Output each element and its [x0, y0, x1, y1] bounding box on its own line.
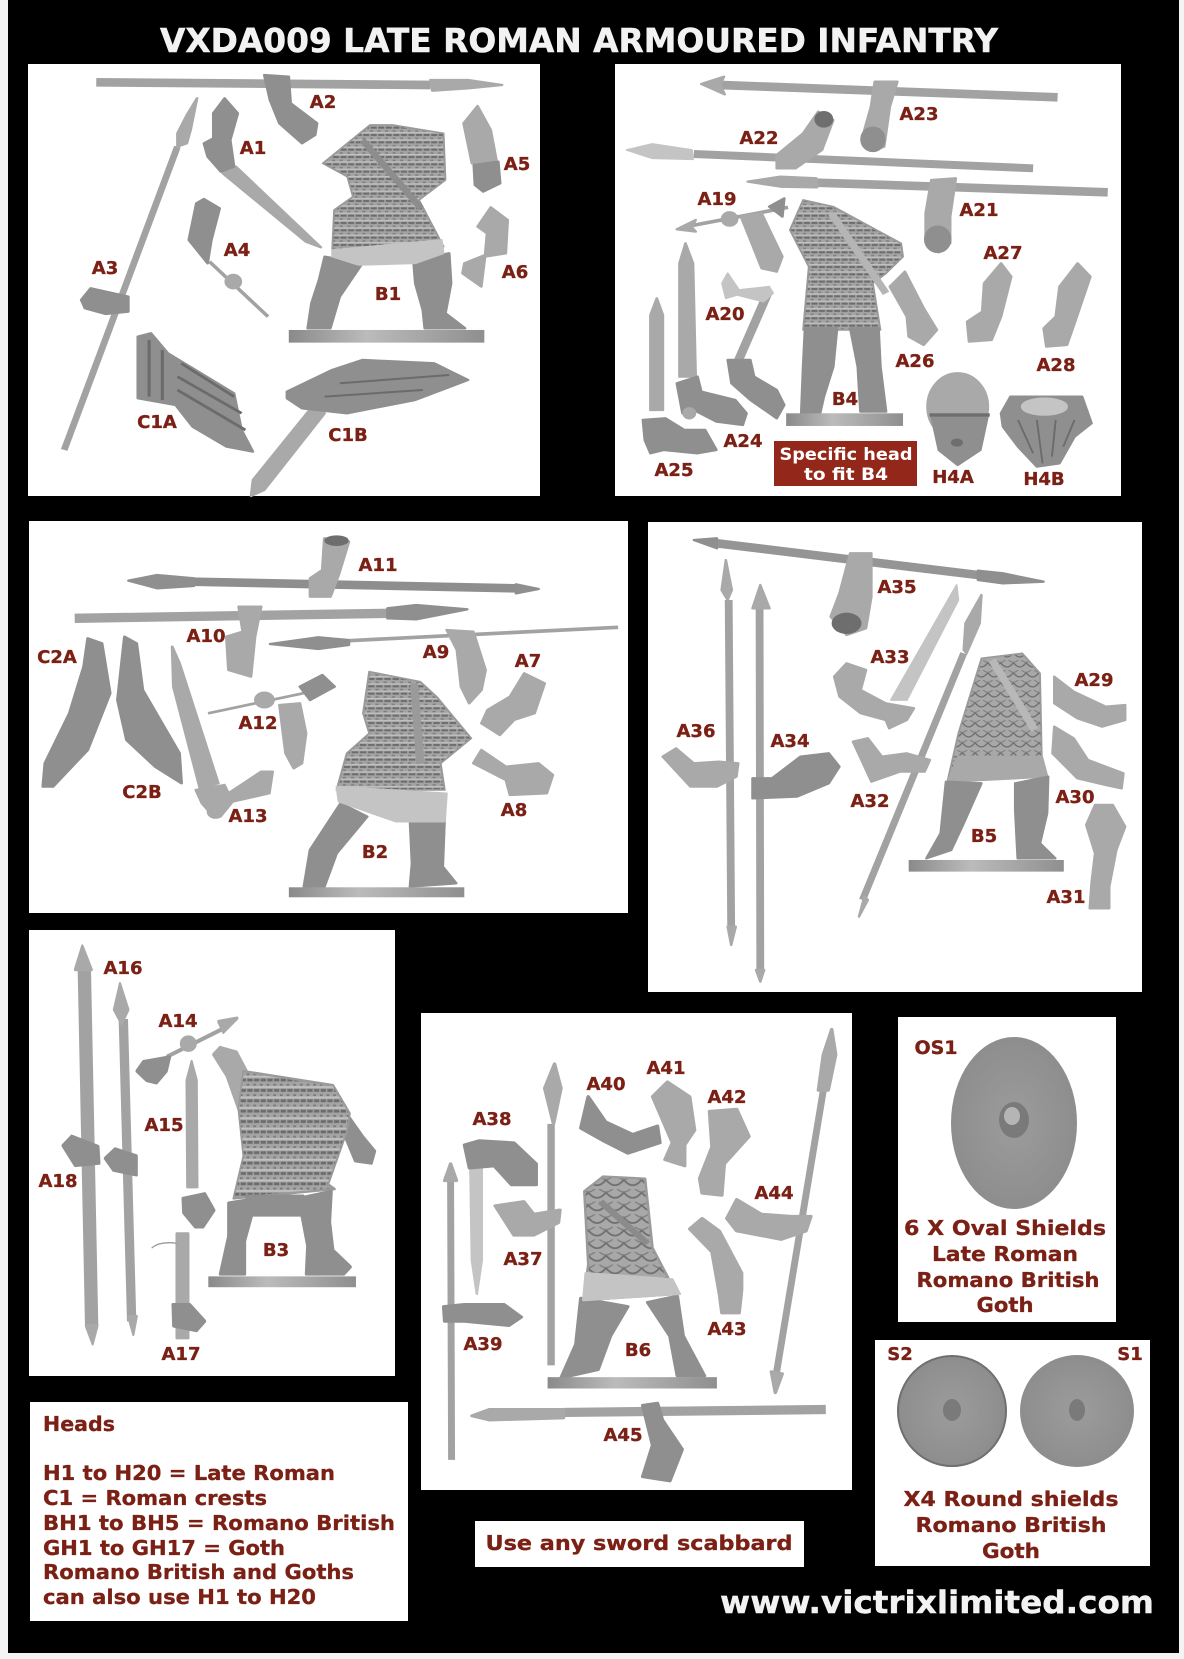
label A41: A41 — [647, 1058, 685, 1079]
label A38: A38 — [473, 1109, 511, 1130]
label B2: B2 — [362, 842, 388, 863]
panel: B5 sprue — [648, 522, 1142, 992]
arm A27 — [967, 263, 1011, 342]
spear and arm A44 — [727, 1029, 836, 1393]
spear and arm A35 — [694, 538, 1044, 635]
sword arm A25 — [643, 298, 716, 453]
label A10: A10 — [187, 626, 225, 647]
label B4: B4 — [832, 389, 858, 410]
label A33: A33 — [871, 647, 909, 668]
label A37: A37 — [504, 1249, 542, 1270]
arm A31 — [1086, 805, 1125, 908]
spear and arm A39 — [444, 1164, 521, 1460]
label A30: A30 — [1056, 787, 1094, 808]
axe hand A17 — [152, 1234, 205, 1338]
label S1: S1 — [1117, 1344, 1143, 1365]
label OS1: OS1 — [914, 1037, 958, 1059]
sword arm A1 — [204, 98, 321, 247]
label A39: A39 — [464, 1334, 502, 1355]
label A29: A29 — [1075, 670, 1113, 691]
label A6: A6 — [502, 262, 528, 283]
spear and arm A21 — [748, 177, 1108, 252]
label B1: B1 — [375, 284, 401, 305]
crest C1A — [138, 333, 253, 452]
panel: B4 sprue — [615, 64, 1121, 496]
label C2B: C2B — [122, 782, 162, 803]
crest C2B — [118, 637, 182, 783]
hand with arrow A14 — [137, 1018, 237, 1083]
label A5: A5 — [504, 154, 530, 175]
label A40: A40 — [587, 1074, 625, 1095]
label A14: A14 — [159, 1011, 197, 1032]
label B6: B6 — [625, 1340, 651, 1361]
label A27: A27 — [984, 243, 1022, 264]
label A11: A11 — [359, 555, 397, 576]
label A13: A13 — [229, 806, 267, 827]
crest C2A — [43, 638, 110, 787]
arm A28 — [1044, 263, 1090, 347]
sword arm A33 — [834, 585, 958, 728]
label A18: A18 — [39, 1171, 77, 1192]
text block: head groups: H1 to H20 = Late Roman — [43, 1461, 335, 1485]
label B5: B5 — [971, 826, 997, 847]
arm with arrow A19 — [677, 198, 788, 272]
label A12: A12 — [239, 713, 277, 734]
axe arm A20 — [722, 273, 784, 418]
label C1B: C1B — [328, 425, 368, 446]
sword arm A13 — [172, 647, 273, 818]
label A3: A3 — [92, 258, 118, 279]
panel: B2 sprue — [29, 521, 628, 913]
spear and hand A18 — [63, 946, 99, 1344]
panel: oval shield — [898, 1017, 1116, 1322]
panel: heads list — [30, 1402, 408, 1621]
label A4: A4 — [224, 240, 250, 261]
label B3: B3 — [263, 1240, 289, 1261]
callout: specific head — [774, 441, 917, 486]
label A22: A22 — [740, 128, 778, 149]
arm A7 — [481, 673, 545, 735]
text block: round shields: X4 Round shields — [904, 1487, 1118, 1511]
spear and arm A32 — [853, 595, 981, 917]
icon: round shield S2 — [898, 1356, 1006, 1466]
figure B1 — [289, 125, 484, 343]
arm A26 — [890, 272, 937, 345]
title: VXDA009 LATE ROMAN ARMOURED INFANTRY — [160, 21, 999, 60]
spear A36 with arm — [663, 560, 738, 945]
spear and arm A37 — [495, 1064, 561, 1365]
text block: round shields: Romano British — [916, 1513, 1106, 1537]
label A42: A42 — [708, 1087, 746, 1108]
heading: Heads: Heads — [43, 1412, 115, 1436]
spear and arm A45 — [472, 1403, 826, 1481]
text block: oval shields: Goth — [976, 1293, 1034, 1317]
label A25: A25 — [655, 460, 693, 481]
spear and arm A23 — [701, 77, 1058, 151]
icon: oval shield — [951, 1037, 1077, 1209]
panel: B1 sprue — [28, 64, 540, 496]
label A45: A45 — [604, 1425, 642, 1446]
arm A43 — [690, 1218, 742, 1313]
spear and arm A2 — [96, 75, 502, 143]
label A44: A44 — [755, 1183, 793, 1204]
figure B5 — [909, 653, 1064, 872]
callout: scabbard note — [475, 1521, 804, 1567]
text block: head groups: can also use H1 to H20 — [43, 1585, 316, 1609]
spear and arm A10 — [75, 605, 467, 677]
spear and arm A22 — [627, 111, 1033, 168]
arm A5 — [464, 106, 500, 192]
label A23: A23 — [900, 104, 938, 125]
label A28: A28 — [1037, 355, 1075, 376]
figure B6 — [548, 1176, 717, 1388]
label A8: A8 — [501, 800, 527, 821]
arm A8 — [473, 750, 553, 795]
panel: round shields — [875, 1340, 1150, 1566]
figure B4 — [786, 200, 903, 426]
label H4B: H4B — [1023, 469, 1065, 490]
label A2: A2 — [310, 92, 336, 113]
crest C1B — [251, 360, 468, 496]
label C2A: C2A — [37, 647, 77, 668]
label H4A: H4A — [932, 467, 974, 488]
label A34: A34 — [771, 731, 809, 752]
text block: head groups — [43, 1461, 395, 1609]
text block: head groups: C1 = Roman crests — [43, 1486, 267, 1510]
text block: head groups: Romano British and Goths — [43, 1560, 354, 1584]
callout: specific head: Specific head — [780, 445, 912, 465]
arm A29 — [1054, 677, 1125, 727]
arm A41 — [653, 1082, 695, 1166]
label A35: A35 — [878, 577, 916, 598]
spear and arm A11 — [129, 535, 539, 597]
text block: oval shields — [904, 1216, 1106, 1317]
figure B2 — [289, 672, 471, 897]
text block: head groups: GH1 to GH17 = Goth — [43, 1536, 285, 1560]
label A1: A1 — [240, 138, 266, 159]
label S2: S2 — [887, 1344, 913, 1365]
arm A40 — [581, 1097, 660, 1153]
figure B3 — [208, 1047, 375, 1287]
arm A42 — [700, 1109, 749, 1195]
label A19: A19 — [698, 189, 736, 210]
label A20: A20 — [706, 304, 744, 325]
label A32: A32 — [851, 791, 889, 812]
text block: oval shields: Romano British — [916, 1268, 1100, 1292]
label A36: A36 — [677, 721, 715, 742]
callout: specific head: to fit B4 — [804, 465, 888, 485]
label C1A: C1A — [137, 412, 177, 433]
icon: round shield S1 — [1020, 1355, 1134, 1467]
text block: head groups: BH1 to BH5 = Romano British — [43, 1511, 395, 1535]
label A17: A17 — [162, 1344, 200, 1365]
label A21: A21 — [960, 200, 998, 221]
label A9: A9 — [423, 642, 449, 663]
label A26: A26 — [896, 351, 934, 372]
text block: round shields: Goth — [982, 1539, 1040, 1563]
arm with arrow A4 — [189, 199, 268, 317]
hair H4B — [1001, 397, 1092, 467]
label A43: A43 — [708, 1319, 746, 1340]
panel: B6 sprue — [421, 1013, 852, 1490]
text block: oval shields: Late Roman — [932, 1242, 1078, 1266]
spear and arm A9 — [270, 627, 618, 703]
panel: B3 sprue — [29, 930, 395, 1376]
label A16: A16 — [104, 958, 142, 979]
spear and hand A16 — [105, 984, 137, 1334]
sword hand A15 — [183, 1062, 214, 1227]
website url: www.victrixlimited.com — [720, 1585, 1154, 1621]
label A24: A24 — [724, 431, 762, 452]
sword arm A24 — [677, 243, 747, 425]
text block: round shields — [904, 1487, 1118, 1563]
label A7: A7 — [515, 651, 541, 672]
callout: scabbard note: Use any sword scabbard — [486, 1531, 792, 1555]
spear and hand A3 — [64, 98, 197, 450]
helmet head H4A — [928, 373, 990, 465]
spear A34 with arm — [752, 585, 839, 982]
arm A30 — [1052, 727, 1123, 788]
label A15: A15 — [145, 1115, 183, 1136]
label A31: A31 — [1047, 887, 1085, 908]
arm with arrow A12 — [208, 675, 335, 768]
text block: oval shields: 6 X Oval Shields — [904, 1216, 1106, 1240]
sword arm A38 — [464, 1141, 536, 1294]
arm A6 — [462, 207, 508, 287]
